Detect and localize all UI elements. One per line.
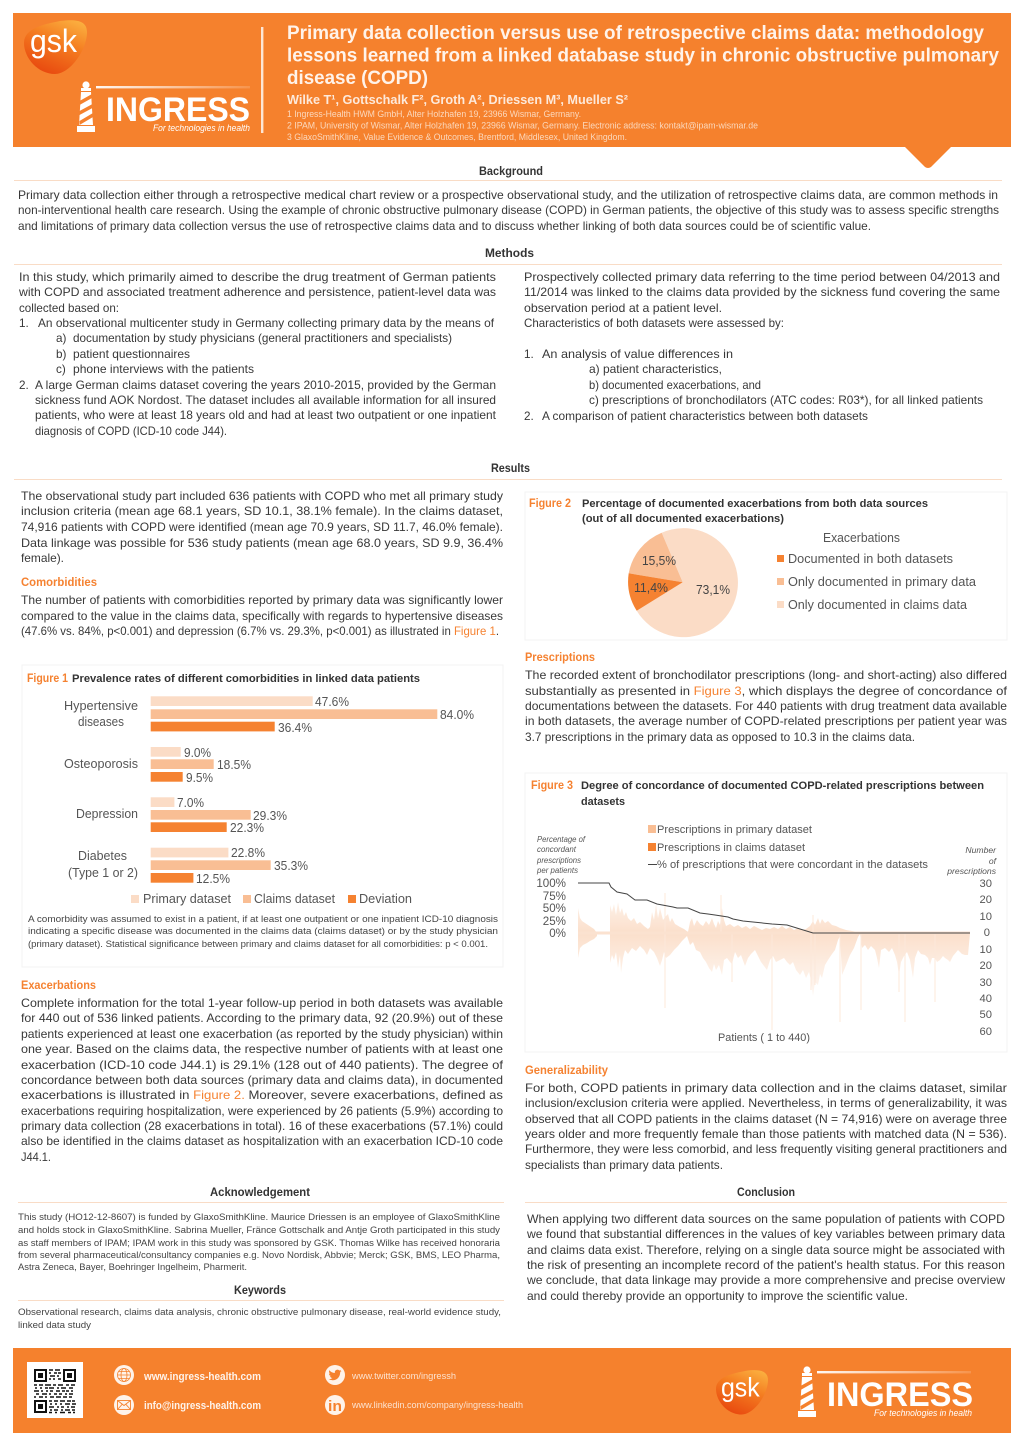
- left axis title: Percentage of: [537, 834, 586, 844]
- text: methods right: 11/2014 was linked to the claims data provided by the sickness fund covering the same: [524, 286, 1000, 299]
- heading: Background: Background: [479, 165, 543, 178]
- text: results intro: female).: [21, 552, 64, 565]
- value labels: 9.0%: [184, 746, 211, 760]
- text: generalizability: Furthermore, they were less comorbid, and less frequently visiting general practitioners and: [525, 1143, 1007, 1156]
- right axis labels: 10: [980, 944, 992, 956]
- pie: 11,4%: [634, 581, 668, 595]
- category labels: Hypertensive: [64, 699, 138, 713]
- logo: Ingress footer: INGRESS: [827, 1376, 973, 1414]
- value labels: 29.3%: [253, 809, 287, 823]
- text: background: and limitations of primary data collection versus the use of retrospective claims data and to discuss whether linking of both data sources could be of scientific value.: [18, 220, 871, 233]
- text: conclusion: and could thereby provide an opportunity to improve the scientific value.: [527, 1290, 908, 1303]
- text: generalizability: For both, COPD patients in primary data collection and in the claims dataset, similar: [525, 1082, 1007, 1095]
- text: methods left: 2.: [19, 379, 29, 392]
- figure note: indicating a specific disease was documented in the claims data (claims dataset) or by the study physician: [28, 926, 498, 937]
- header banner: [13, 13, 1011, 168]
- heading: Generalizability: Generalizability: [525, 1064, 609, 1077]
- left axis labels: 100%: [536, 877, 566, 890]
- text: methods left: with COPD and associated treatment adherence and persistence, patient-level data was: [18, 286, 496, 299]
- text: conclusion: the risk of presenting an incomplete record of the patient's health status. For this reason: [527, 1259, 1005, 1272]
- text: methods left: b): [56, 348, 67, 361]
- text: prescriptions: in both datasets, the average number of COPD-related prescriptions per patient year was: [525, 715, 1007, 728]
- concordance line: [578, 883, 970, 933]
- bars: [151, 696, 437, 883]
- right axis labels: 60: [980, 1026, 992, 1038]
- icon: envelope: [114, 1395, 134, 1415]
- text: methods right: Characteristics of both datasets were assessed by:: [524, 317, 784, 330]
- logo: Ingress: For technologies in health: [153, 123, 250, 133]
- pie legend: Only documented in primary data: [788, 575, 976, 589]
- left axis title: prescriptions: [536, 855, 582, 865]
- panel: figure 3 concordance chart: [525, 773, 1007, 1052]
- text: methods right: Prospectively collected primary data referring to the time period between 04/2013 and: [524, 271, 1000, 284]
- logo: GSK footer: gsk: [721, 1372, 760, 1402]
- affiliations: 3 GlaxoSmithKline, Value Evidence & Outcomes, Brentford, Middlesex, United Kingdom.: [287, 132, 627, 142]
- text: acknowledgement: [18, 1212, 501, 1273]
- text: generalizability: inclusion/exclusion criteria were applied. Nevertheless, in terms of generalizability, it was: [525, 1097, 1007, 1110]
- right axis title: [946, 845, 998, 876]
- category labels: Osteoporosis: [64, 757, 138, 771]
- right axis labels: 40: [980, 993, 992, 1005]
- text: acknowledgement: Astra Zeneca, Bayer, Boehringer Ingelheim, Pharmerit.: [18, 1262, 247, 1273]
- text: methods right: 2.: [524, 410, 534, 423]
- text: exacerbations: one year. Based on the claims data, the respective number of patients with at least one: [21, 1043, 503, 1056]
- text: methods right: [524, 271, 1000, 423]
- panel: figure 1 bar chart: [22, 665, 503, 967]
- figure 3 legend: Prescriptions in primary dataset: [657, 824, 812, 836]
- pie: [628, 528, 738, 637]
- text: methods left: a): [56, 332, 67, 345]
- logo: Ingress footer: For technologies in health: [874, 1408, 972, 1418]
- figure 3 heading: [531, 779, 984, 808]
- text: results intro: 74,916 patients with COPD were identified (mean age 70.9 years, SD 11.7, 46.0% female).: [21, 521, 503, 534]
- figure 2 heading: Figure 2: [529, 497, 571, 510]
- text: exacerbations: exacerbations requiring hospitalization, were experienced by 26 patients (5.9%) according to: [21, 1105, 503, 1118]
- value labels: 36.4%: [278, 721, 312, 735]
- text: comorbidities: compared to the value in the claims data, specifically with regards to hypertensive diseases: [21, 610, 503, 623]
- value labels: 7.0%: [177, 796, 204, 810]
- text: results intro: The observational study part included 636 patients with COPD who met all primary study: [21, 490, 503, 503]
- text: methods right: c) prescriptions of bronchodilators (ATC codes: R03*), for all linked patients: [589, 394, 983, 407]
- left axis labels: 0%: [549, 927, 566, 940]
- text: exacerbations: Complete information for the total 1-year follow-up period in both datasets was available: [21, 997, 503, 1010]
- text: acknowledgement: from several pharmaceutical/consultancy companies e.g. Novo Nordisk, Abbvie; Merck; GSK, BMS, LEO Pharma,: [18, 1250, 500, 1261]
- pie legend: Documented in both datasets: [788, 552, 953, 566]
- pie: 15,5%: [642, 554, 676, 568]
- text: keywords: linked data study: [18, 1320, 91, 1331]
- logo: Ingress: [77, 81, 250, 133]
- text: generalizability: specialists than primary data patients.: [525, 1159, 723, 1172]
- title: [287, 22, 999, 89]
- email link: info@ingress-health.com: [144, 1400, 261, 1412]
- value labels: 22.8%: [231, 846, 265, 860]
- x axis label: Patients ( 1 to 440): [718, 1032, 810, 1044]
- value labels: 12.5%: [196, 872, 230, 886]
- text: prescriptions: documentations between the datasets. For 440 patients with drug treatment data available: [525, 700, 1007, 713]
- text: exacerbations: primary data collection (28 exacerbations in total). 16 of these exacerbations (57.1%) could: [21, 1120, 503, 1133]
- heading: Comorbidities: Comorbidities: [21, 576, 97, 589]
- text: background: non-interventional health care research. Using the example of chronic obstructive pulmonary disease (COPD) in German patients, the objective of this study was to assess specific strengths: [18, 204, 999, 217]
- website link: www.ingress-health.com: [143, 1371, 261, 1383]
- figure 1 heading: Prevalence rates of different comorbidities in linked data patients: [72, 673, 420, 685]
- icon: twitter: [325, 1365, 345, 1385]
- footer banner: [13, 1348, 1011, 1433]
- text: generalizability: observed that all COPD patients in the claims dataset (N = 74,916) were on average three: [525, 1113, 1007, 1126]
- text: prescriptions: [525, 669, 1008, 744]
- title: disease (COPD): [287, 67, 428, 89]
- figure note: A comorbidity was assumed to exist in a patient, if at least one outpatient or one inpatient ICD-10 diagnosis: [28, 914, 498, 925]
- affiliations: [287, 109, 758, 142]
- title: lessons learned from a linked database study in chronic obstructive pulmonary: [287, 44, 999, 66]
- twitter link: www.twitter.com/ingressh: [351, 1371, 456, 1381]
- logo: GSK: [24, 20, 87, 74]
- right axis labels: 20: [980, 960, 992, 972]
- text: acknowledgement: This study (HO12-12-8607) is funded by GlaxoSmithKline. Maurice Driessen is an employee of GlaxoSmithKline: [18, 1212, 500, 1223]
- text: methods left: patients, who were at least 18 years old and had at least two outpatient or one inpatient: [35, 409, 497, 422]
- heading: Results: Results: [491, 462, 530, 475]
- value labels: 9.5%: [186, 771, 213, 785]
- value labels: 18.5%: [217, 758, 251, 772]
- text: comorbidities: [21, 594, 503, 638]
- legend: Claims dataset: [254, 892, 335, 906]
- heading: Methods: Methods: [485, 247, 534, 260]
- text: methods left: sickness fund AOK Nordost. The dataset includes all available information for all insured: [35, 394, 496, 407]
- text: methods right: 1.: [524, 348, 534, 361]
- text: methods right: a) patient characteristics,: [589, 363, 722, 376]
- legend: Primary dataset: [143, 892, 231, 906]
- value labels: 35.3%: [274, 859, 308, 873]
- text: conclusion: we found that substantial differences in the values of key variables between primary data: [526, 1228, 1006, 1241]
- value labels: [177, 695, 474, 886]
- value labels: 84.0%: [440, 708, 474, 722]
- text: methods left: diagnosis of COPD (ICD-10 code J44).: [35, 425, 227, 438]
- text: results intro: Data linkage was possible for 536 study patients (mean age 68.0 years, SD 9.9, 36.4%: [21, 537, 503, 550]
- left axis title: concordant: [537, 844, 577, 854]
- left axis labels: [536, 877, 566, 940]
- prescription bars: [578, 893, 970, 1030]
- heading: Prescriptions: Prescriptions: [525, 651, 595, 664]
- text: methods left: A large German claims dataset covering the years 2010-2015, provided by the German: [35, 379, 496, 392]
- figure note: [28, 914, 498, 950]
- right axis title: Number: [965, 845, 997, 855]
- title: Primary data collection versus use of retrospective claims data: methodology: [287, 22, 984, 44]
- affiliations: 2 IPAM, University of Wismar, Alter Holzhafen 19, 23966 Wismar, Germany. Electronic address: kontakt@ipam-wismar.de: [287, 120, 758, 130]
- category labels: (Type 1 or 2): [68, 866, 138, 880]
- text: methods left: documentation by study physicians (general practitioners and specialists): [73, 332, 452, 345]
- text: exacerbations: J44.1.: [21, 1151, 51, 1164]
- figure note: (primary dataset). Statistical significance between primary and claims dataset for all comorbidities: p < 0.001.: [28, 939, 488, 950]
- icon: globe: [114, 1365, 134, 1385]
- figure 3 legend: [648, 824, 928, 871]
- pie legend: Only documented in claims data: [788, 598, 967, 612]
- text: methods right: b) documented exacerbations, and: [589, 379, 761, 392]
- heading: Acknowledgement: Acknowledgement: [210, 1186, 310, 1199]
- text: methods left: [18, 271, 497, 438]
- heading: Conclusion: Conclusion: [737, 1186, 795, 1199]
- left axis title: [536, 834, 586, 875]
- figure 2 heading: [529, 497, 928, 525]
- text: methods right: observation period at a patient level.: [524, 302, 722, 315]
- figure 2 heading: (out of all documented exacerbations): [582, 513, 784, 525]
- text: comorbidities: The number of patients with comorbidities reported by primary data was significantly lower: [21, 594, 503, 607]
- text: prescriptions: 3.7 prescriptions in the primary data as opposed to 10.3 in the claims data.: [525, 731, 915, 744]
- text: exacerbations: for 440 out of 536 linked patients. According to the primary data, 92 (20.9%) out of these: [21, 1012, 503, 1025]
- text: methods left: An observational multicenter study in Germany collecting primary data by the means of: [38, 317, 495, 330]
- legend: Deviation: [359, 892, 412, 906]
- text: background: Primary data collection either through a retrospective medical chart review or a prospective observational study, and the utilization of retrospective claims data, are common methods in: [18, 189, 998, 202]
- text: methods right: A comparison of patient characteristics between both datasets: [542, 410, 868, 423]
- figure 3 heading: Figure 3: [531, 779, 574, 792]
- figure 3 legend: Prescriptions in claims dataset: [657, 842, 805, 854]
- figure 3 legend: % of prescriptions that were concordant in the datasets: [657, 859, 928, 871]
- text: exacerbations: [21, 997, 504, 1164]
- text: conclusion: [526, 1213, 1006, 1303]
- text: acknowledgement: and holds stock in GlaxoSmithKline. Sabrina Mueller, Fränce Gottschalk and Antje Groth participated in this study: [18, 1225, 500, 1236]
- text: exacerbations: also be identified in the claims dataset as hospitalization with an exacerbation ICD-10 code: [21, 1135, 503, 1148]
- figure 3 heading: Degree of concordance of documented COPD-related prescriptions between: [581, 780, 984, 792]
- figure 2 heading: Percentage of documented exacerbations from both data sources: [582, 498, 928, 510]
- text: comorbidities: (47.6% vs. 84%, p<0.001) and depression (6.7% vs. 29.3%, p<0.001) as illustrated in Figure 1.: [21, 625, 499, 638]
- pie: 73,1%: [696, 583, 730, 597]
- text: prescriptions: substantially as presented in Figure 3 , which displays the degree of concordance of: [525, 685, 1008, 698]
- text: generalizability: [525, 1082, 1007, 1172]
- right axis labels: [980, 878, 992, 1038]
- text: acknowledgement: as staff members of IPAM; IPAM work in this study was sponsored by GSK. Thomas Wilke has received honoraria: [18, 1238, 501, 1249]
- panel: figure 2 pie chart: [525, 492, 1007, 640]
- heading: Keywords: Keywords: [234, 1284, 286, 1297]
- right axis labels: 30: [980, 878, 992, 890]
- text: results intro: inclusion criteria (mean age 68.1 years, SD 10.1, 38.1% female). In the claims dataset,: [21, 505, 503, 518]
- text: conclusion: we conclude, that data linkage may provide a more comprehensive and precise overview: [526, 1274, 1006, 1287]
- text: methods right: An analysis of value differences in: [542, 348, 733, 361]
- right axis labels: 20: [980, 894, 992, 906]
- text: methods left: patient questionnaires: [73, 348, 190, 361]
- heading: Exacerbations: Exacerbations: [21, 979, 96, 992]
- value labels: 47.6%: [315, 695, 349, 709]
- logo: Ingress footer: [798, 1366, 973, 1418]
- text: methods left: collected based on:: [19, 302, 119, 315]
- right axis labels: 50: [980, 1009, 992, 1021]
- right axis labels: 30: [980, 977, 992, 989]
- text: exacerbations: concordance between both data sources (primary data and claims data), in documented: [21, 1074, 503, 1087]
- right axis title: prescriptions: [946, 866, 997, 876]
- text: methods left: c): [56, 363, 66, 376]
- value labels: 22.3%: [230, 821, 264, 835]
- left axis labels: 25%: [543, 915, 566, 928]
- text: generalizability: years older and more frequently female than those patients with matched data (N = 536).: [525, 1128, 1007, 1141]
- text: results intro: [21, 490, 503, 565]
- legend: [131, 892, 412, 906]
- text: prescriptions: The recorded extent of bronchodilator prescriptions (long- and short-acting) also differed: [525, 669, 1007, 682]
- category labels: Diabetes: [78, 849, 127, 863]
- logo: GSK footer: [716, 1370, 768, 1415]
- QR code: [27, 1362, 83, 1418]
- logo: GSK: gsk: [30, 23, 78, 59]
- text: methods left: In this study, which primarily aimed to describe the drug treatment of German patients: [19, 271, 496, 284]
- text: conclusion: When applying two different data sources on the same population of patients with COPD: [527, 1213, 1005, 1226]
- text: exacerbations: exacerbation (ICD-10 code J44.1) is 29.1% (128 out of 440 patients). The degree of: [21, 1059, 504, 1072]
- right axis title: of: [989, 856, 998, 866]
- text: keywords: Observational research, claims data analysis, chronic obstructive pulmonary disease, real-world evidence study,: [18, 1307, 501, 1318]
- right axis labels: 0: [984, 927, 990, 939]
- affiliations: 1 Ingress-Health HWM GmbH, Alter Holzhafen 19, 23966 Wismar, Germany.: [287, 109, 581, 119]
- left axis labels: 75%: [543, 890, 566, 903]
- category labels: diseases: [78, 715, 124, 729]
- category labels: [64, 699, 138, 880]
- left axis labels: 50%: [543, 902, 566, 915]
- text: background: [18, 189, 999, 233]
- text: exacerbations: patients experienced at least one exacerbation (as reported by the study physician) within: [21, 1028, 503, 1041]
- pie legend: Exacerbations: [823, 531, 900, 545]
- left axis title: per patients: [536, 865, 579, 875]
- text: methods left: 1.: [19, 317, 29, 330]
- icon: linkedin: [325, 1395, 345, 1415]
- authors: Wilke T¹, Gottschalk F², Groth A², Driessen M³, Mueller S²: [287, 92, 628, 107]
- linkedin link: www.linkedin.com/company/ingress-health: [351, 1400, 523, 1410]
- figure 3 heading: datasets: [581, 796, 625, 808]
- figure 1 heading: Figure 1: [27, 672, 68, 685]
- logo: Ingress: INGRESS: [106, 91, 250, 129]
- category labels: Depression: [76, 807, 138, 821]
- text: keywords: [18, 1307, 501, 1331]
- right axis labels: 10: [980, 911, 992, 923]
- icon: linkedin: in: [328, 1398, 342, 1415]
- pie legend: [777, 531, 976, 612]
- text: conclusion: and claims data exist. Therefore, relying on a single data source might be associated with: [527, 1244, 1005, 1257]
- text: methods left: phone interviews with the patients: [73, 363, 254, 376]
- text: exacerbations: exacerbations is illustrated in Figure 2. Moreover, severe exacerbations, defined as: [21, 1089, 503, 1102]
